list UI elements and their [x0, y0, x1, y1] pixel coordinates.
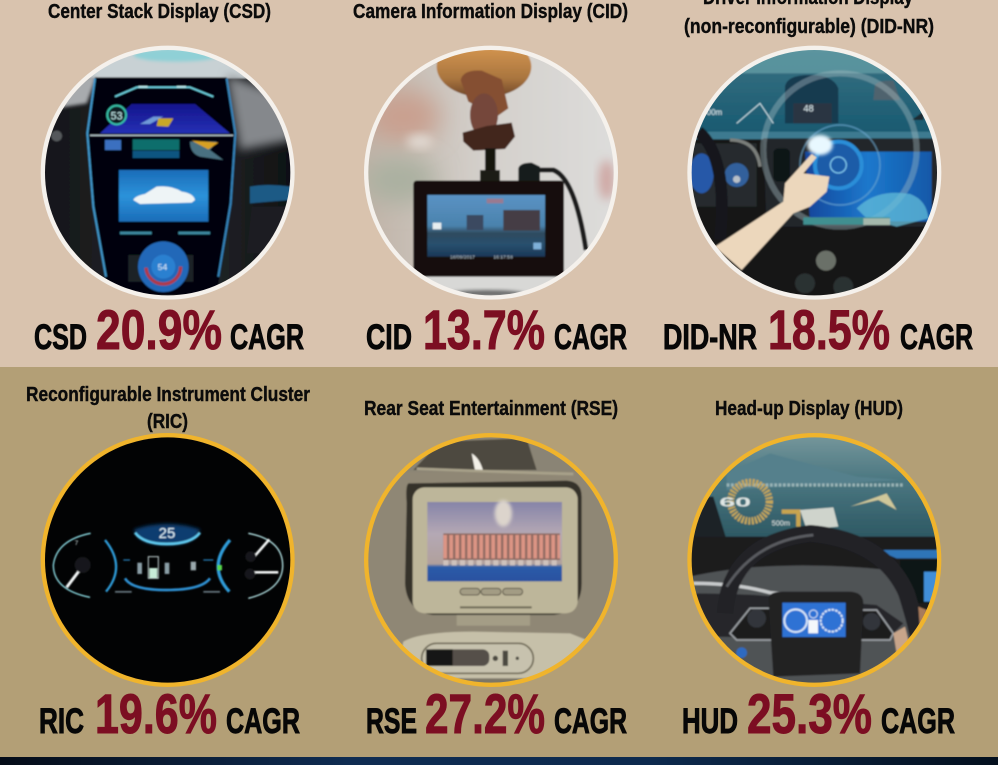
stat: HUD CAGR: 25.3%: [747, 682, 872, 745]
photo: touch dashboard: 00m: [707, 108, 723, 117]
stat: RSE CAGR: [366, 682, 627, 745]
photo: dash camera: [363, 36, 623, 303]
heading: RIC: Reconfigurable Instrument Cluster: [26, 384, 310, 406]
heading: CSD: Center Stack Display (CSD): [48, 1, 271, 23]
stat: RIC CAGR: CAGR: [226, 702, 300, 741]
photo: touch dashboard: 48: [803, 104, 814, 114]
heading: DID-NR: (non-reconfigurable) (DID-NR): [684, 16, 934, 38]
panel: Camera Information Display: [353, 1, 628, 361]
stat: DID-NR CAGR: 18.5%: [768, 298, 890, 361]
panel: Driver Information Display: [663, 0, 973, 361]
stat: RSE CAGR: CAGR: [554, 702, 627, 741]
panel: Reconfigurable Instrument Cluster: [26, 384, 310, 745]
heading: RIC: (RIC): [147, 411, 188, 433]
photo: steering wheel and HUD: [687, 430, 947, 690]
stat: CID CAGR: CAGR: [554, 318, 627, 357]
photo: instrument cluster: [33, 430, 300, 690]
photo: instrument cluster: 7: [75, 540, 79, 547]
stat: DID-NR CAGR: DID-NR: [663, 318, 757, 357]
stat: CID CAGR: [366, 298, 627, 361]
photo: steering wheel and HUD: 500m: [772, 518, 790, 527]
stat: RSE CAGR: 27.2%: [425, 682, 545, 745]
photo: instrument cluster: 25: [159, 526, 175, 542]
stat: HUD CAGR: CAGR: [881, 702, 955, 741]
stat: CID CAGR: 13.7%: [423, 298, 545, 361]
stat: RIC CAGR: RIC: [39, 702, 84, 741]
photo: seatback screen: [363, 430, 623, 692]
photo: dash camera: 16:17:58: [493, 255, 513, 261]
heading: HUD: Head-up Display (HUD): [715, 398, 903, 420]
heading: CID: Camera Information Display (CID): [353, 1, 628, 23]
stat: HUD CAGR: HUD: [682, 702, 738, 741]
photo: center stack: [33, 43, 300, 303]
photo: steering wheel and HUD: 60: [719, 495, 751, 510]
panel: Rear Seat Entertainment: [363, 398, 627, 745]
stat: CSD CAGR: CSD: [34, 318, 87, 357]
photo: center stack: 54: [158, 262, 167, 272]
footer band: [0, 757, 998, 765]
heading: RIC: [26, 384, 310, 433]
stat: CID CAGR: CID: [366, 318, 412, 357]
photo: center stack: 53: [111, 110, 123, 122]
panel: Center Stack Display: [33, 1, 304, 361]
stat: RIC CAGR: 19.6%: [95, 682, 217, 745]
heading: RSE: Rear Seat Entertainment (RSE): [364, 398, 618, 420]
stat: HUD CAGR: [682, 682, 955, 745]
panel background: bottom row: [0, 367, 998, 757]
stat: CSD CAGR: 20.9%: [96, 298, 222, 361]
photo: touch dashboard: [687, 43, 947, 300]
stat: DID-NR CAGR: CAGR: [900, 318, 973, 357]
stat: DID-NR CAGR: [663, 298, 973, 361]
stat: RIC CAGR: [39, 682, 300, 745]
panel background: top row: [0, 0, 998, 367]
stat: RSE CAGR: RSE: [366, 702, 417, 741]
heading: DID-NR: [684, 0, 934, 38]
stat: CSD CAGR: [34, 298, 304, 361]
photo: dash camera: 18/09/2017: [450, 255, 475, 261]
stat: CSD CAGR: CAGR: [230, 318, 304, 357]
panel: Head-up Display: [682, 398, 955, 745]
